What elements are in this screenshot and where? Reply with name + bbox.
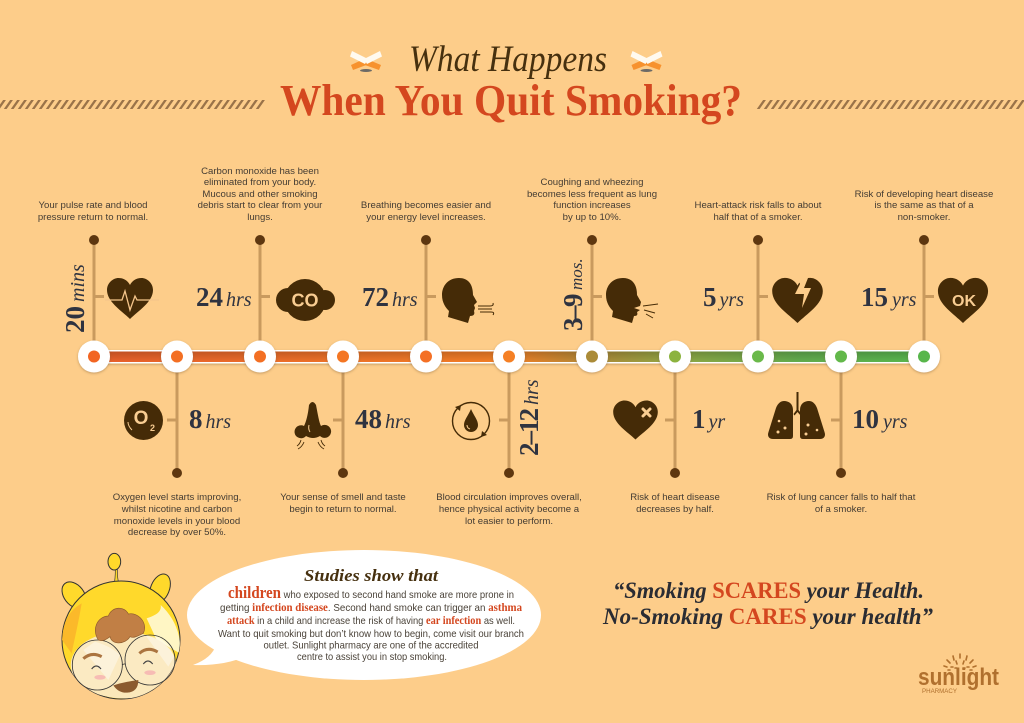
description: monoxide levels in your blood (114, 516, 240, 527)
description: Breathing becomes easier and (361, 200, 491, 211)
icon: bandaged heart (613, 401, 658, 440)
progress bar (94, 350, 924, 364)
head (62, 581, 180, 699)
description (767, 492, 916, 515)
label 1 yr: 1yr (692, 404, 725, 434)
icon: OK heart: OK (952, 293, 976, 310)
description (38, 200, 148, 223)
milestone: 3-9 mos (527, 177, 658, 331)
description: Risk of heart disease (630, 492, 720, 503)
quote: “Smoking SCARES your Health. (613, 578, 924, 603)
milestone: 8 hrs (113, 401, 241, 538)
description (113, 492, 241, 538)
label 15 yrs: 15yrs (861, 282, 917, 312)
label 10 yrs: 10yrs (852, 404, 908, 434)
quote (602, 578, 933, 629)
description: debris start to clear from your (198, 200, 323, 211)
antenna (108, 553, 125, 593)
description (436, 492, 582, 527)
milestone: 20 mins (38, 200, 159, 333)
bubble body (218, 583, 524, 663)
bubble body: attack in a child and increase the risk of having ear infection as well. (227, 615, 515, 627)
logo subtitle: PHARMACY (922, 688, 958, 695)
description: by up to 10%. (563, 212, 621, 223)
description: non-smoker. (898, 212, 950, 223)
icon: crossed cigarettes left (350, 51, 382, 72)
icon: blood circulation (452, 402, 490, 440)
description: your energy level increases. (366, 212, 486, 223)
description (361, 200, 491, 223)
icon: head breathing (442, 278, 494, 323)
logo: sunlight pharmacy (918, 654, 999, 695)
bubble body: getting infection disease. Second hand smoke can trigger an asthma (220, 602, 522, 614)
milestone: 2-12 hrs (436, 379, 582, 527)
quote: No-Smoking CARES your health” (602, 604, 933, 629)
face (83, 649, 158, 693)
glasses (72, 635, 175, 690)
icon: oxygen: O (134, 408, 148, 429)
ears (57, 571, 174, 613)
heading line 2: When You Quit Smoking? (280, 76, 742, 125)
milestone: 10 yrs (767, 392, 916, 515)
stems (94, 240, 934, 473)
label 24 hrs: 24hrs (196, 282, 252, 312)
description: hence physical activity become a (439, 504, 580, 515)
description: decrease by over 50%. (128, 527, 226, 538)
label 20 mins: 20mins (60, 264, 90, 333)
bubble body: outlet. Sunlight pharmacy are one of the accredited (264, 640, 479, 652)
description: decreases by half. (636, 504, 714, 515)
heading line 1: What Happens (409, 39, 607, 80)
label 72 hrs: 72hrs (362, 282, 418, 312)
icon: oxygen (124, 401, 163, 440)
description (695, 200, 822, 223)
stem end dots (89, 235, 929, 478)
bubble body: centre to assist you in stop smoking. (297, 652, 447, 663)
icon: coughing head (606, 278, 658, 323)
label 2-12 hrs: 2–12hrs (514, 379, 544, 456)
label 5 yrs: 5yrs (703, 282, 744, 312)
icon: nose (295, 402, 331, 449)
description: Oxygen level starts improving, (113, 492, 241, 503)
milestone: 72 hrs (361, 200, 494, 323)
description: Your pulse rate and blood (38, 200, 148, 211)
description: Risk of lung cancer falls to half that (767, 492, 916, 503)
milestone: 5 yrs (695, 200, 823, 323)
icon: CO cloud (276, 279, 335, 321)
hair (95, 608, 145, 643)
label 3-9 mos: 3–9mos. (558, 258, 588, 331)
description (527, 177, 657, 223)
description: of a smoker. (815, 504, 867, 515)
description: Heart-attack risk falls to about (695, 200, 822, 211)
icon: heart with pulse (105, 278, 159, 319)
description: Carbon monoxide has been (201, 166, 319, 177)
milestone: 15 yrs (855, 189, 993, 323)
description: Mucous and other smoking (202, 189, 318, 200)
logo wordmark: sunlight (918, 664, 999, 691)
description: Your sense of smell and taste (280, 492, 406, 503)
speech bubble (187, 550, 541, 680)
description: whilst nicotine and carbon (121, 504, 232, 515)
bubble body: Want to quit smoking but don’t know how to begin, come visit our branch (218, 629, 524, 640)
description (198, 166, 323, 223)
description (630, 492, 720, 515)
description: function increases (553, 200, 631, 211)
label 48 hrs: 48hrs (355, 404, 411, 434)
icon: oxygen: 2 (150, 423, 155, 433)
label 8 hrs: 8hrs (189, 404, 231, 434)
description: becomes less frequent as lung (527, 189, 657, 200)
milestone: 48 hrs (280, 402, 411, 515)
icon: crossed cigarettes right (630, 51, 662, 72)
timeline (78, 235, 940, 478)
description: Blood circulation improves overall, (436, 492, 582, 503)
logo rays (944, 654, 976, 670)
description: lungs. (247, 212, 273, 223)
description: begin to return to normal. (289, 504, 397, 515)
description (280, 492, 406, 515)
title (0, 39, 1024, 125)
milestone: 24 hrs (196, 166, 335, 321)
icon: broken heart (772, 278, 823, 323)
icon: CO cloud: CO (292, 290, 318, 310)
description: Coughing and wheezing (541, 177, 643, 188)
bubble heading: Studies show that (304, 566, 438, 585)
description: Risk of developing heart disease (855, 189, 993, 200)
description: pressure return to normal. (38, 212, 148, 223)
milestone nodes (78, 340, 940, 372)
description: is the same as that of a (874, 200, 974, 211)
bubble body: children who exposed to second hand smoke are more prone in (228, 583, 514, 602)
description: half that of a smoker. (713, 212, 803, 223)
description (855, 189, 993, 223)
icon: lungs (768, 392, 825, 439)
milestone: 1 yr (613, 401, 725, 515)
description: eliminated from your body. (204, 177, 316, 188)
description: lot easier to perform. (465, 516, 553, 527)
mascot (57, 553, 180, 699)
